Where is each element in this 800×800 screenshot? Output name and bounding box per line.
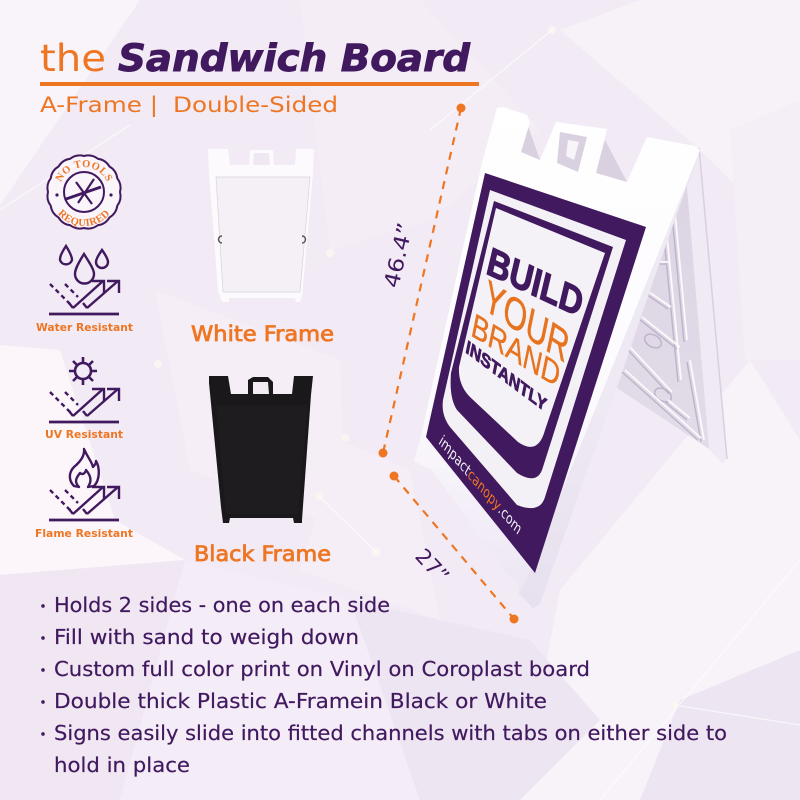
- purple border shape: [451, 201, 613, 478]
- subtitle: A-Frame |: [40, 93, 158, 118]
- feature list: Holds 2 sides - one on each side: [54, 593, 390, 617]
- title underline: [40, 82, 479, 86]
- label: flame resistant: Flame Resistant: [35, 527, 133, 540]
- title: the: [40, 37, 106, 80]
- outer white shape: [443, 190, 626, 508]
- height dimension line: [378, 104, 466, 458]
- handle gaps seen through: [520, 120, 627, 182]
- label: uv resistant: UV Resistant: [45, 428, 123, 441]
- label: white frame: White Frame: [191, 322, 334, 346]
- label: black frame: Black Frame: [194, 542, 331, 566]
- feature list: Custom full color print on Vinyl on Coroplast board: [54, 657, 590, 681]
- icon: water resistant: [49, 246, 119, 314]
- icon: flame resistant: [49, 449, 119, 520]
- sign copy: INSTANTLY: [464, 336, 548, 416]
- front frame: [414, 107, 700, 608]
- feature list: Fill with sand to weigh down: [54, 625, 359, 649]
- sign copy: BUILD: [483, 240, 587, 326]
- icon: no tools required badge: REQUIRED: [58, 208, 108, 227]
- feature list: Double thick Plastic A-Framein Black or White: [54, 689, 547, 713]
- subtitle: Double-Sided: [173, 93, 338, 118]
- black frame sign: [209, 376, 313, 523]
- a-frame sign photo: [414, 107, 727, 608]
- subtitle: [40, 93, 338, 118]
- icon: no tools required badge: NO TOOLS: [55, 160, 112, 182]
- sign url: impactcanopy.com: [436, 433, 524, 539]
- feature list: hold in place: [54, 753, 190, 777]
- purple vinyl panel: [426, 173, 646, 573]
- label: water resistant: Water Resistant: [36, 321, 133, 334]
- feature list: Signs easily slide into fitted channels with tabs on either side to: [54, 721, 727, 745]
- width label: 27”: [410, 544, 454, 588]
- sign copy: YOUR: [480, 271, 573, 373]
- sign copy: BRAND: [469, 306, 563, 394]
- icon: no tools required badge: [46, 154, 122, 230]
- icon: uv resistant: [49, 357, 119, 422]
- feature list: [41, 593, 727, 777]
- title: Sandwich Board: [118, 37, 471, 80]
- height label: 46.4”: [379, 220, 418, 290]
- white frame sign: [208, 149, 314, 302]
- handle opening: [557, 132, 587, 172]
- width dimension line: [390, 472, 518, 624]
- back panel: [617, 148, 727, 463]
- inner white shape: [459, 208, 605, 447]
- sign copy: [464, 240, 587, 416]
